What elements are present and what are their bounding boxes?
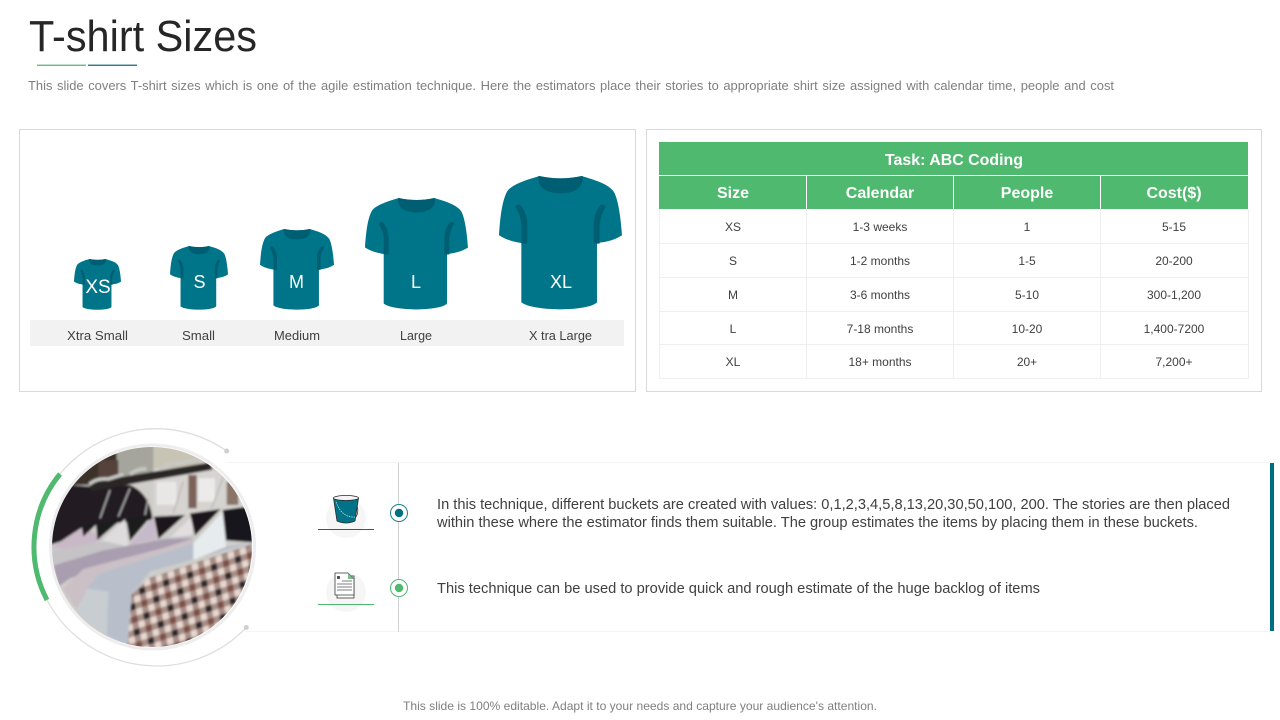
size labels: Large (400, 329, 432, 343)
table rows: M (728, 288, 738, 302)
table header (659, 142, 1248, 209)
table rows: 300-1,200 (1147, 288, 1201, 302)
table rows: 3-6 months (850, 288, 910, 302)
table header: Cost($) (1146, 185, 1202, 202)
table rows: XS (725, 220, 741, 234)
size labels (67, 329, 592, 343)
table grid (659, 209, 1248, 379)
shirt: XS (74, 259, 121, 310)
size labels: Medium (274, 329, 320, 343)
table rows: XL (726, 355, 741, 369)
shirt: XS: XS (85, 277, 111, 298)
table rows: 5-15 (1162, 220, 1186, 234)
label strip (30, 320, 624, 346)
shirt: XL (499, 176, 622, 309)
table rows: L (730, 322, 737, 336)
photo: shirts on a rack (50, 445, 255, 650)
footer note: This slide is 100% editable. Adapt it to your needs and capture your audience's attention. (403, 699, 877, 713)
table rows: 20+ (1017, 355, 1037, 369)
icon: document (318, 572, 374, 612)
size labels: X tra Large (529, 329, 592, 343)
text block: buckets: In this technique, different buckets are created with values: 0,1,2,3,4,5,8,13,20,30,50,100, 200. The stories are then placed (437, 497, 1230, 513)
icon: bucket (318, 496, 374, 538)
table header: People (1001, 185, 1053, 202)
table rows (725, 220, 1205, 369)
table rows: 18+ months (848, 355, 912, 369)
table header: Size (717, 185, 749, 202)
table rows: 10-20 (1012, 322, 1043, 336)
panel: technique notes frame (226, 462, 1274, 632)
table rows: 20-200 (1155, 254, 1193, 268)
panel: task table (646, 130, 1262, 392)
title: T-shirt Sizes (29, 12, 257, 61)
table rows: 1-3 weeks (853, 220, 907, 234)
shirt: M (260, 229, 334, 310)
size labels: Xtra Small (67, 329, 128, 343)
table rows: 1,400-7200 (1144, 322, 1205, 336)
text block: buckets: within these where the estimator finds them suitable. The group estimates the items by placing them in these buckets. (436, 515, 1198, 531)
table rows: 5-10 (1015, 288, 1039, 302)
table rows: 7-18 months (847, 322, 913, 336)
table rows: 1 (1024, 220, 1031, 234)
panel: t-shirt size chart (20, 130, 636, 392)
shirt: L: L (411, 272, 421, 292)
table rows: 1-5 (1018, 254, 1036, 268)
timeline marker: green (390, 580, 408, 596)
shirt: S: S (193, 272, 206, 292)
title underline (37, 65, 137, 66)
subtitle text: This slide covers T-shirt sizes which is one of the agile estimation technique. Here the estimators place their stories to appropriate shirt size assigned with calendar time, people and cost (28, 79, 1115, 93)
shirt: S (170, 246, 228, 310)
text block: buckets (436, 497, 1230, 531)
table rows: 1-2 months (850, 254, 910, 268)
text block: quick estimate: This technique can be used to provide quick and rough estimate of the huge backlog of items (437, 581, 1040, 597)
table header: Calendar (846, 185, 914, 202)
table rows: S (729, 254, 737, 268)
shirt: L (365, 198, 468, 309)
table rows: 7,200+ (1155, 355, 1193, 369)
photo ring (34, 429, 254, 666)
size labels: Small (182, 329, 215, 343)
shirt: XL: XL (550, 272, 572, 292)
table header: Task: ABC Coding (885, 152, 1023, 169)
shirt: M: M (289, 272, 304, 292)
timeline marker: teal (390, 504, 408, 522)
